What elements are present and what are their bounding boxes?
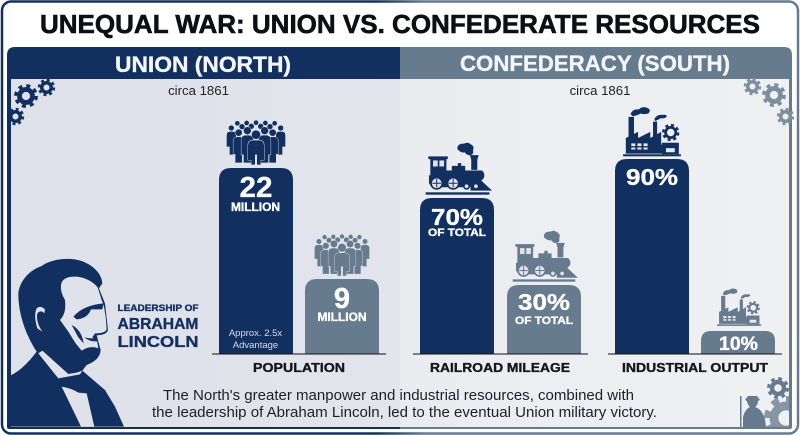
value: 30 percent (515, 289, 573, 327)
icon: confederate factory (717, 288, 761, 326)
heading: union: UNION (NORTH) (115, 52, 291, 77)
icon: confederate crowd (315, 234, 369, 276)
label: industrial output: INDUSTRIAL OUTPUT (622, 360, 768, 375)
value: 22 million: 22 (240, 172, 272, 204)
value: 10 percent: 10% (719, 334, 758, 355)
chart: industrial output (608, 107, 782, 375)
icon: union factory (623, 107, 681, 156)
icon: union train (426, 143, 492, 195)
bar: union industry (615, 159, 689, 354)
value: 90 percent: 90% (626, 164, 678, 190)
label: railroad mileage: RAILROAD MILEAGE (430, 360, 570, 375)
date: confederacy: circa 1861 (570, 83, 630, 98)
summary text: The North's greater manpower and industrial resources, combined with (163, 388, 634, 404)
label: population: POPULATION (253, 360, 345, 375)
summary text (152, 388, 657, 421)
value: 30 percent: OF TOTAL (515, 315, 573, 327)
value: 22 million: MILLION (231, 202, 280, 214)
summary text: the leadership of Abraham Lincoln, led to the eventual Union military victory. (152, 405, 657, 421)
value: 9 million: 9 (334, 283, 350, 315)
value: 70 percent: OF TOTAL (428, 227, 486, 239)
icon: confederate train (513, 231, 578, 282)
value: 22 million (231, 172, 280, 214)
icon: gears left (8, 80, 54, 124)
panel: confederacy (400, 47, 800, 436)
callout: leadership of abraham lincoln (118, 303, 199, 351)
bar: union population (219, 168, 293, 354)
heading: confederacy: CONFEDERACY (SOUTH) (460, 51, 730, 76)
value: 9 million (318, 283, 366, 324)
chart: population (212, 120, 386, 375)
value: 9 million: MILLION (318, 312, 366, 324)
icon: gears right (745, 79, 793, 124)
panel: union (7, 47, 400, 429)
value: 70 percent: 70% (431, 204, 483, 230)
note: advantage: Advantage (233, 340, 278, 351)
value: 30 percent: 30% (518, 289, 570, 315)
bar: confederate population (305, 279, 379, 354)
callout: leadership of abraham lincoln: LEADERSHIP OF (118, 303, 199, 314)
callout: leadership of abraham lincoln: ABRAHAM (118, 316, 198, 333)
date: union: circa 1861 (168, 83, 229, 98)
note: advantage (229, 328, 282, 351)
bar: confederate industry (701, 331, 775, 354)
bar: union railroad (420, 198, 494, 354)
note: advantage: Approx. 2.5x (229, 328, 282, 339)
callout: leadership of abraham lincoln: LINCOLN (118, 334, 198, 351)
value: 70 percent (428, 204, 486, 239)
portrait: abraham lincoln (8, 259, 124, 427)
bar: confederate railroad (507, 285, 581, 354)
chart: railroad mileage (413, 143, 588, 375)
icon: union crowd (227, 120, 285, 165)
icon: soldier and gears (740, 377, 789, 427)
title: UNEQUAL WAR: UNION VS. CONFEDERATE RESOURCES (40, 9, 760, 39)
